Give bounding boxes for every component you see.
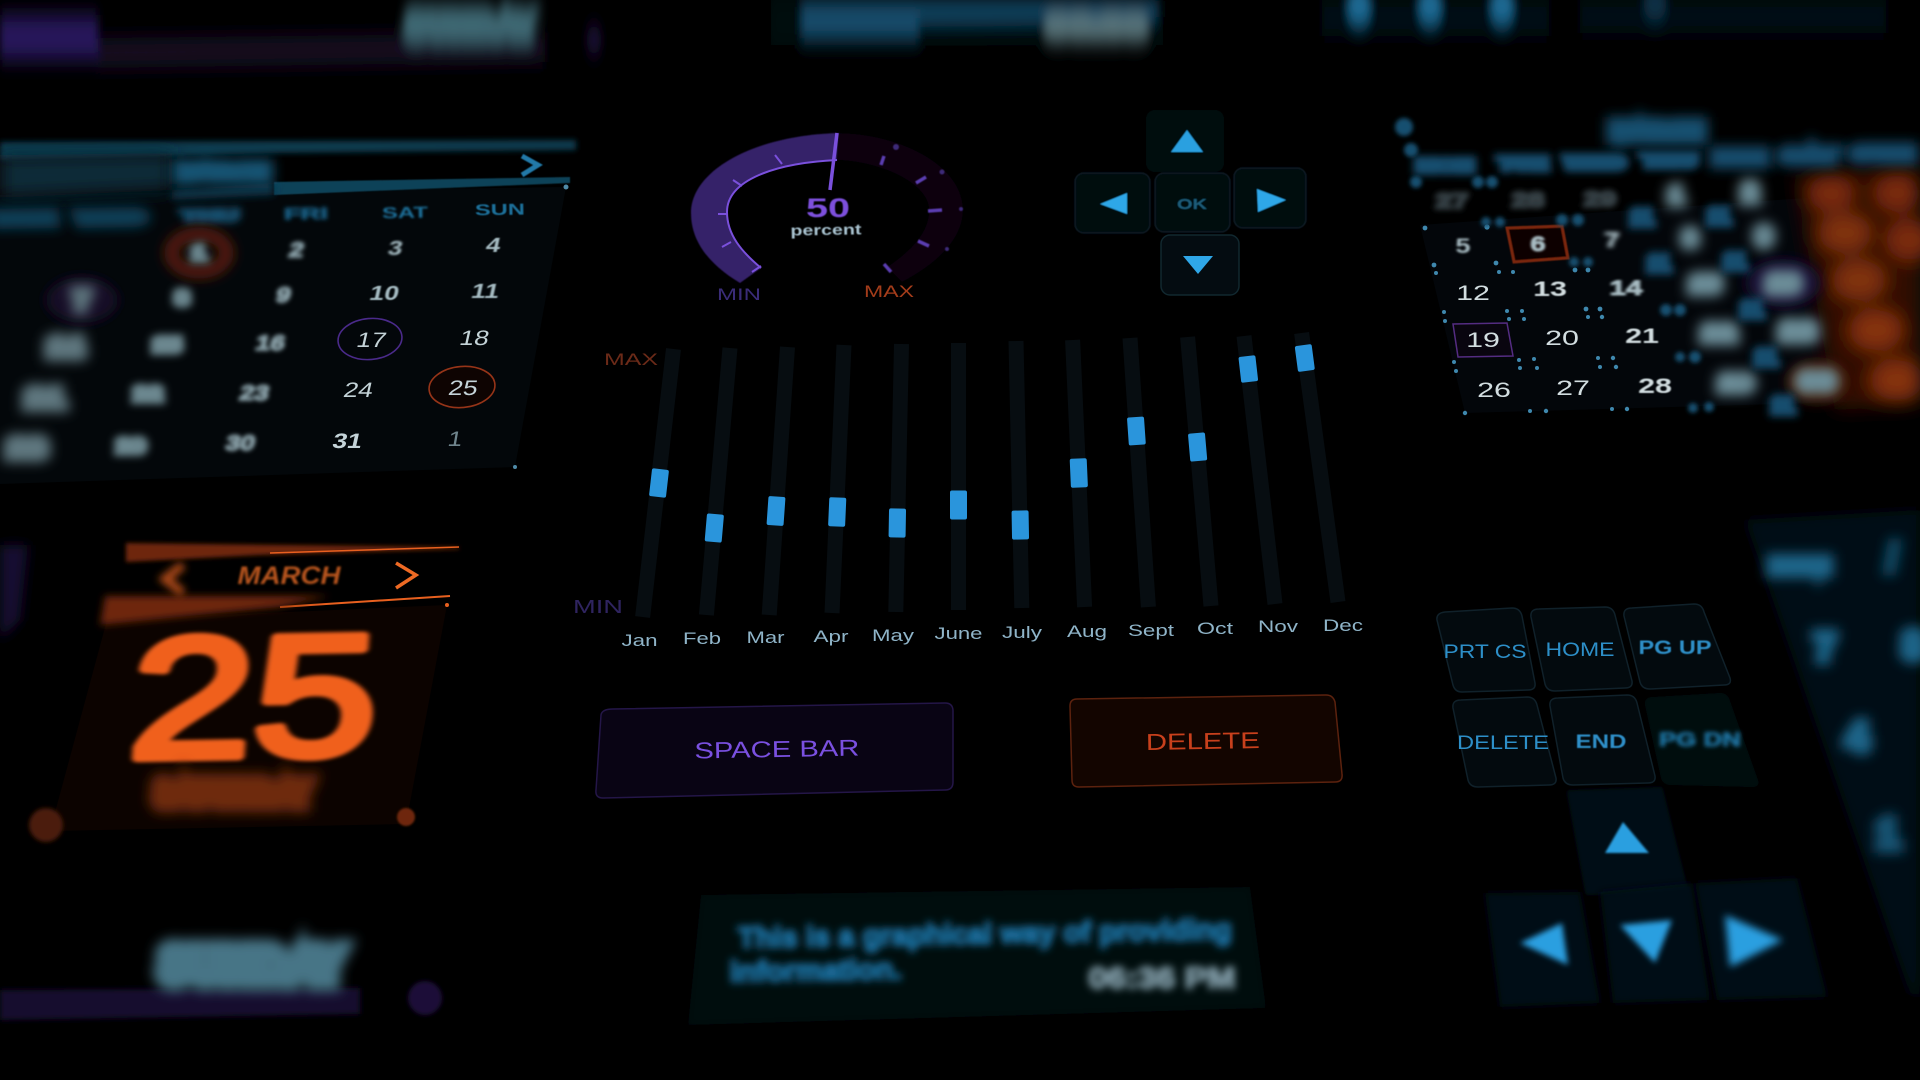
highlight ring: day 30 bbox=[1787, 361, 1847, 403]
big date number: 25 bbox=[124, 599, 384, 795]
day numbers: 24 bbox=[341, 379, 376, 402]
highlight ring: day 7 bbox=[46, 277, 118, 323]
date numbers: 5 bbox=[1455, 235, 1471, 258]
key: delete: DELETE bbox=[1457, 733, 1549, 754]
weekday labels: SAT bbox=[382, 205, 428, 222]
day numbers: 14 bbox=[48, 333, 82, 362]
day numbers: 7 bbox=[74, 285, 90, 315]
button: delete bbox=[1070, 695, 1342, 787]
weekend orange cells bbox=[1795, 165, 1920, 410]
date numbers: 2 bbox=[1742, 178, 1758, 207]
weekday labels: SAT bbox=[1782, 146, 1838, 166]
key: pg up: PG UP bbox=[1638, 638, 1712, 659]
key: home bbox=[1531, 607, 1632, 691]
highlight ring: day 25 bbox=[427, 364, 497, 410]
month labels: Nov bbox=[1258, 617, 1299, 636]
date numbers: 8 bbox=[1683, 226, 1697, 252]
key: left bbox=[1075, 173, 1150, 233]
gauge inner line and ticks bbox=[718, 133, 837, 272]
key: up arrow bbox=[1570, 790, 1685, 892]
date numbers: 7 bbox=[1604, 229, 1620, 252]
weekday labels: THU bbox=[1641, 151, 1697, 171]
button: space bar bbox=[596, 703, 953, 798]
blue event markers: 11 bbox=[1740, 297, 1764, 322]
previous chevron bbox=[165, 565, 183, 593]
slider min label: MIN bbox=[573, 597, 623, 617]
key: home: HOME bbox=[1546, 640, 1614, 661]
date numbers: 15 bbox=[1690, 272, 1720, 297]
top strip: blurred distant panels bbox=[0, 0, 1886, 68]
blue event markers: 11 bbox=[1723, 249, 1747, 274]
date numbers: 16 bbox=[1767, 269, 1799, 298]
day numbers: 28 bbox=[8, 435, 46, 463]
month labels: Jan bbox=[622, 631, 658, 650]
highlight ring: day 17 bbox=[336, 316, 404, 362]
gauge filled arc bbox=[691, 133, 839, 283]
weekday labels: SUN bbox=[475, 202, 525, 219]
key: end: END bbox=[1576, 732, 1626, 753]
blue event markers: 11 bbox=[1707, 204, 1731, 229]
blue event markers: 11 bbox=[1647, 251, 1671, 276]
info message panel bbox=[688, 887, 1266, 1025]
day numbers: 4 bbox=[484, 234, 504, 257]
key: prt cs: PRT CS bbox=[1444, 642, 1526, 663]
month labels: Feb bbox=[683, 629, 721, 648]
weekday labels: TUE bbox=[1498, 154, 1548, 174]
blue event markers: 11 bbox=[1754, 345, 1778, 370]
month labels: Apr bbox=[814, 627, 849, 646]
bottom left blurred header: SUNDAY bbox=[159, 937, 345, 995]
message text: information. bbox=[730, 953, 902, 989]
button: delete: DELETE bbox=[1146, 727, 1260, 755]
weekday labels bbox=[1416, 144, 1913, 176]
key: ok: OK bbox=[1177, 196, 1207, 213]
slider max label: MAX bbox=[604, 350, 658, 369]
top right key row bbox=[1322, 0, 1886, 36]
date numbers: 14 bbox=[1610, 277, 1643, 300]
keypad: blurred number pad: / bbox=[1887, 537, 1897, 578]
gauge value: 50 bbox=[806, 193, 850, 223]
weekday labels: FRI bbox=[284, 206, 328, 223]
bottom left blurred header bbox=[0, 937, 442, 1020]
day numbers: 3 bbox=[386, 237, 405, 260]
date numbers: 20 bbox=[1545, 326, 1579, 350]
highlighted day 19 box bbox=[1453, 323, 1513, 357]
card header lines bbox=[100, 543, 459, 625]
date numbers bbox=[1436, 178, 1835, 402]
key: pg up bbox=[1624, 604, 1730, 689]
message text bbox=[730, 913, 1232, 989]
blurred weekday label: SATURDAY bbox=[153, 773, 313, 815]
date numbers: 21 bbox=[1625, 324, 1659, 348]
blue event markers: 11 bbox=[1771, 393, 1795, 418]
date numbers: 6 bbox=[1530, 233, 1546, 256]
key: pg dn bbox=[1645, 693, 1758, 787]
key: right bbox=[1234, 168, 1306, 228]
key: end bbox=[1550, 695, 1655, 785]
card corner dots bbox=[29, 603, 449, 842]
day numbers: 25 bbox=[446, 377, 480, 400]
button: space bar: SPACE BAR bbox=[694, 735, 860, 763]
keypad: blurred number pad: 4 bbox=[1846, 715, 1869, 759]
date numbers: 26 bbox=[1477, 378, 1511, 402]
keypad: blurred number pad: 1 bbox=[1876, 810, 1900, 857]
day numbers: 16 bbox=[253, 332, 288, 355]
day numbers bbox=[8, 234, 504, 463]
date numbers: 28 bbox=[1638, 374, 1672, 398]
keypad: blurred number pad: 7 bbox=[1814, 627, 1836, 669]
month labels: July bbox=[1002, 623, 1043, 642]
gauge min label: MIN bbox=[717, 285, 761, 304]
top centre message panel bbox=[771, 0, 1163, 45]
keypad: navigation cluster bbox=[1437, 604, 1827, 1007]
next month chevron bbox=[522, 156, 538, 175]
date numbers: 1 bbox=[1669, 183, 1683, 209]
top left purple header: SUNDAY bbox=[406, 3, 536, 44]
weekday labels: THU bbox=[181, 207, 239, 226]
date numbers: 29 bbox=[1720, 370, 1752, 396]
key: down bbox=[1161, 235, 1239, 295]
cell corner dots bbox=[1423, 224, 1629, 415]
day numbers: 9 bbox=[274, 284, 293, 307]
weekday labels: SUN bbox=[1853, 144, 1913, 164]
gauge: 50 percent bbox=[691, 133, 963, 304]
day numbers: 18 bbox=[457, 327, 492, 350]
key: pg dn: PG DN bbox=[1659, 730, 1741, 751]
month labels: May bbox=[872, 626, 915, 645]
purple highlight: day 16 bbox=[1745, 259, 1821, 307]
date numbers: 13 bbox=[1533, 277, 1567, 301]
month labels: Sept bbox=[1128, 621, 1174, 640]
month labels: Dec bbox=[1323, 616, 1364, 635]
weekday labels: WED bbox=[78, 209, 144, 228]
day numbers: 10 bbox=[367, 282, 402, 305]
day numbers: 22 bbox=[133, 382, 163, 406]
panel corner dots bbox=[513, 184, 568, 469]
weekday labels bbox=[0, 202, 525, 229]
calendar header band bbox=[0, 140, 576, 200]
key: prt cs bbox=[1437, 608, 1535, 692]
slider chart: monthly levels bbox=[573, 333, 1364, 650]
day numbers: 30 bbox=[223, 432, 258, 455]
keypad: blurred number pad: NUM bbox=[1771, 556, 1829, 578]
key: left arrow bbox=[1485, 892, 1600, 1007]
day numbers: 1 bbox=[446, 428, 465, 451]
top centre message panel: 06:36 bbox=[1048, 11, 1144, 42]
slider handles bbox=[649, 344, 1315, 543]
date numbers: 19 bbox=[1466, 328, 1500, 352]
date numbers: 22 bbox=[1703, 320, 1735, 346]
d-pad keys bbox=[1075, 110, 1306, 295]
key: right arrow bbox=[1695, 878, 1827, 1000]
slider tracks bbox=[643, 333, 1338, 617]
date numbers: 28 bbox=[1512, 189, 1544, 212]
left edge purple fragment bbox=[0, 545, 28, 640]
day numbers: 1 bbox=[192, 241, 206, 265]
month title blurred: MARCH bbox=[1610, 116, 1704, 146]
month labels: Mar bbox=[746, 628, 785, 647]
card body bbox=[50, 605, 447, 831]
top left purple header bbox=[0, 3, 602, 68]
calendar body bbox=[0, 187, 566, 484]
panel: orange date card bbox=[29, 543, 459, 842]
month label: MARCH bbox=[238, 562, 342, 590]
key: ok bbox=[1155, 173, 1230, 232]
key: delete bbox=[1453, 697, 1556, 787]
date numbers: 29 bbox=[1584, 188, 1616, 211]
highlight ring: day 1 bbox=[171, 234, 227, 272]
day numbers: 15 bbox=[152, 333, 182, 357]
out-of-focus corner dots bbox=[1395, 118, 1714, 413]
day numbers: 23 bbox=[237, 382, 272, 405]
month labels: Aug bbox=[1067, 622, 1107, 641]
day numbers: 17 bbox=[354, 329, 389, 352]
key: down arrow bbox=[1600, 883, 1710, 1003]
message text: This is a graphical way of providing bbox=[738, 913, 1232, 955]
day numbers: 31 bbox=[330, 430, 365, 453]
keypad: blurred number pad bbox=[1745, 510, 1920, 1000]
day numbers: 8 bbox=[175, 286, 189, 310]
weekday labels: MON bbox=[1416, 156, 1474, 176]
month labels bbox=[622, 616, 1364, 650]
day numbers: 11 bbox=[469, 280, 502, 303]
month labels: June bbox=[934, 624, 982, 643]
gauge max label: MAX bbox=[864, 282, 914, 301]
next chevron bbox=[396, 563, 416, 588]
day numbers: 21 bbox=[26, 385, 64, 413]
day numbers: 29 bbox=[116, 434, 146, 458]
gauge remaining arc bbox=[837, 133, 963, 282]
date numbers: 12 bbox=[1456, 281, 1490, 305]
date numbers: 9 bbox=[1756, 222, 1772, 251]
weekday labels: FRI bbox=[1715, 148, 1765, 168]
blue event markers bbox=[1630, 204, 1795, 418]
gauge unit: percent bbox=[790, 221, 862, 240]
blue event markers: 11 bbox=[1630, 205, 1654, 230]
day numbers: 2 bbox=[287, 239, 306, 262]
date numbers: 27 bbox=[1436, 190, 1468, 213]
message time: 06:36 PM bbox=[1088, 962, 1236, 995]
key: up bbox=[1146, 110, 1224, 172]
date numbers: 23 bbox=[1780, 318, 1816, 346]
panel: left month calendar bbox=[0, 140, 576, 484]
date numbers: 30 bbox=[1799, 368, 1835, 396]
panel: right month calendar bbox=[1395, 116, 1920, 418]
highlighted day 6 box bbox=[1507, 226, 1568, 262]
month labels: Oct bbox=[1197, 619, 1233, 638]
weekday labels: WED bbox=[1564, 153, 1626, 173]
date numbers: 27 bbox=[1556, 376, 1590, 400]
calendar grid body bbox=[1420, 190, 1920, 413]
calendar header band: MARCH bbox=[176, 159, 270, 186]
